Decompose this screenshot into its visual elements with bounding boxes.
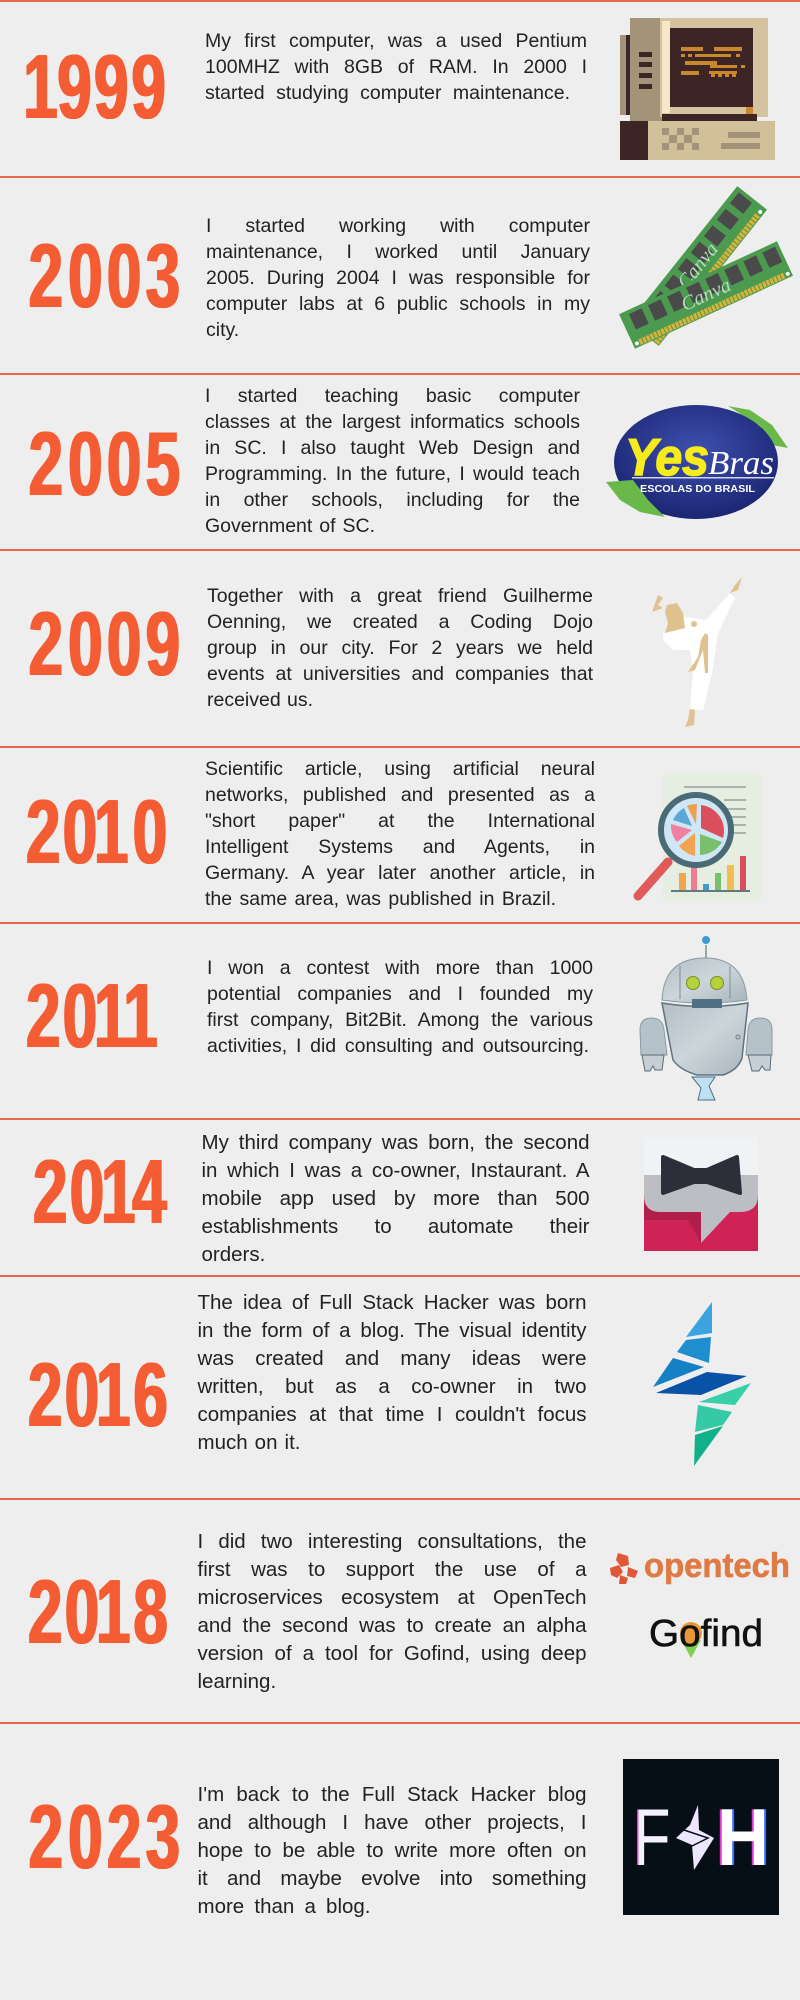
text: back to the blog: hope to be able to write more often on — [198, 1839, 586, 1862]
panel: 2016 Full Stack Hacker idea — [28, 1291, 751, 1466]
text: coding dojo: group in our city. For 2 years we held — [207, 636, 593, 658]
text: consultations: version of a tool for Gofind, using deep — [198, 1642, 586, 1665]
year: 2018: 2018 — [28, 1562, 168, 1663]
text: Instaurant — [202, 1131, 590, 1266]
text: Instaurant: mobile app used by more than 500 — [202, 1187, 590, 1210]
year: 2011: 2011 — [26, 966, 158, 1067]
text: consultations: learning. — [198, 1670, 276, 1693]
text: coding dojo: events at universities and companies that — [207, 662, 593, 684]
text: scientific article: Intelligent Systems and Agents, in — [205, 836, 595, 858]
panel: 2009 coding dojo — [29, 577, 742, 727]
text: back to the blog: I'm back to the Full Stack Hacker blog — [198, 1783, 586, 1806]
year: 2003: 2003 — [29, 226, 180, 327]
icon: FSH glitch logo — [623, 1759, 779, 1915]
text: first computer: started studying computer maintenance. — [205, 82, 570, 104]
text: consultations: I did two interesting consultations, the — [198, 1530, 586, 1553]
text: computer maintenance — [206, 214, 590, 340]
panel: 2005 teaching — [29, 384, 788, 536]
text: computer maintenance: maintenance, I worked until January — [206, 240, 590, 262]
icon: lightning bolt logo — [653, 1302, 751, 1466]
text: coding dojo: Oenning, we created a Coding Dojo — [207, 610, 593, 632]
text: back to the blog: and although I have other projects, I — [198, 1811, 586, 1834]
text: back to the blog: more than a blog. — [198, 1895, 370, 1918]
text: founded Bit2Bit: potential companies and I founded my — [207, 982, 593, 1004]
text: Full Stack Hacker idea: The idea of Full Stack Hacker was born — [198, 1291, 586, 1314]
text: Full Stack Hacker idea: companies at that time I couldn't focus — [198, 1403, 586, 1426]
icon: FSH glitch logo: F — [632, 1793, 669, 1883]
text: coding dojo — [207, 584, 593, 710]
icon: Instaurant bow tie logo — [644, 1154, 758, 1251]
text: scientific article: Scientific article, using artificial neural — [205, 758, 595, 780]
year: 2005: 2005 — [29, 414, 180, 515]
icon: pixel art retro computer — [620, 18, 775, 160]
text: computer maintenance: 2005. During 2004 I was responsible for — [206, 266, 590, 288]
icon: karate kick figure — [652, 577, 742, 727]
panel: 2011 Bit2Bit — [26, 936, 772, 1100]
icon: magnifier over charts — [634, 773, 761, 901]
text: scientific article: the same area, was published in Brazil. — [205, 888, 556, 910]
panel: 2023 back to the blog — [29, 1759, 779, 1918]
text: consultations: first was to support the use of a — [198, 1558, 586, 1581]
year: 2023: 2023 — [29, 1787, 180, 1888]
text: teaching classes: Government of SC. — [205, 514, 375, 536]
text: computer maintenance: I started working with computer — [206, 214, 590, 236]
icon: YesBras logo — [606, 405, 788, 519]
text: founded Bit2Bit: first company, Bit2Bit. Among the various — [207, 1008, 593, 1030]
panel: 2018 consultations — [28, 1530, 790, 1693]
text: scientific article: networks, published and presented as a — [205, 784, 595, 806]
text: Full Stack Hacker idea: written, but as a co-owner in two — [198, 1375, 586, 1398]
icon: FSH glitch logo: H — [715, 1793, 767, 1883]
text: scientific article: Germany. A year later another article, in — [205, 862, 595, 884]
icon: two RAM memory sticks: Canva — [673, 239, 723, 293]
text: first computer: My first computer, was a used Pentium — [205, 30, 587, 52]
text: consultations: and the second was to create an alpha — [198, 1614, 586, 1637]
text: back to the blog — [198, 1783, 586, 1918]
text: consultations — [198, 1530, 587, 1693]
text: teaching classes: I started teaching basic computer — [205, 384, 580, 406]
text: Instaurant: in which I was a co-owner, Instaurant. A — [202, 1159, 590, 1182]
text: teaching classes: in SC. I also taught Web Design and — [205, 436, 580, 458]
text: founded Bit2Bit: activities, I did consulting and outsourcing. — [207, 1034, 589, 1056]
text: first computer — [205, 30, 587, 104]
icon: two RAM memory sticks — [619, 186, 793, 349]
icon: two RAM memory sticks: Canva — [678, 274, 734, 316]
text: Instaurant: establishments to automate their — [202, 1215, 590, 1238]
text: Instaurant: My third company was born, the second — [202, 1131, 590, 1154]
logo: Gofind: Gofind — [649, 1613, 763, 1655]
text: Instaurant: orders. — [202, 1243, 265, 1266]
text: computer maintenance: city. — [206, 318, 239, 340]
icon: YesBras logo: Yes — [625, 429, 709, 487]
text: back to the blog: it and maybe evolve into something — [198, 1867, 586, 1890]
text: computer maintenance: computer labs at 6 public schools in my — [206, 292, 590, 314]
text: coding dojo: received us. — [207, 688, 313, 710]
icon: robot — [640, 936, 772, 1100]
text: teaching classes — [205, 384, 580, 536]
text: Full Stack Hacker idea: much on it. — [198, 1431, 300, 1454]
text: first computer: 100MHZ with 8GB of RAM. In 2000 I — [205, 56, 587, 78]
year: 2014: 2014 — [33, 1142, 167, 1243]
panel: 1999 first computer — [23, 18, 775, 160]
year: 1999: 1999 — [23, 37, 166, 138]
text: Full Stack Hacker idea: in the form of a blog. The visual identity — [198, 1319, 586, 1342]
text: teaching classes: Programming. In the future, I would teach — [205, 462, 580, 484]
year: 2010: 2010 — [26, 782, 167, 883]
text: founded Bit2Bit — [207, 956, 593, 1056]
icon: FSH glitch logo: H — [717, 1793, 769, 1883]
icon: FSH glitch logo: H — [719, 1793, 771, 1883]
text: founded Bit2Bit: I won a contest with more than 1000 — [207, 956, 593, 978]
text: teaching classes: classes at the largest informatics schools — [205, 410, 580, 432]
panel: 2003 computer maintenance — [29, 186, 793, 349]
icon: FSH glitch logo: F — [634, 1793, 670, 1883]
text: Full Stack Hacker idea — [198, 1291, 586, 1454]
logo: opentech: opentech — [644, 1547, 790, 1585]
panel: 2014 Instaurant — [33, 1131, 758, 1266]
icon: YesBras logo: ESCOLAS DO BRASIL — [640, 484, 755, 495]
text: consultations: microservices ecosystem at OpenTech — [198, 1586, 586, 1609]
icon: YesBras logo: Bras — [708, 445, 774, 482]
text: teaching classes: in other schools, including for the — [205, 488, 580, 510]
panel: 2010 scientific article — [26, 758, 761, 910]
text: Full Stack Hacker idea: was created and many ideas were — [198, 1347, 586, 1370]
text: coding dojo: Together with a great friend Guilherme — [207, 584, 593, 606]
year: 2009: 2009 — [29, 594, 180, 695]
text: scientific article — [205, 758, 595, 910]
year: 2016: 2016 — [28, 1345, 168, 1446]
text: scientific article: "short paper" at the International — [205, 810, 595, 832]
